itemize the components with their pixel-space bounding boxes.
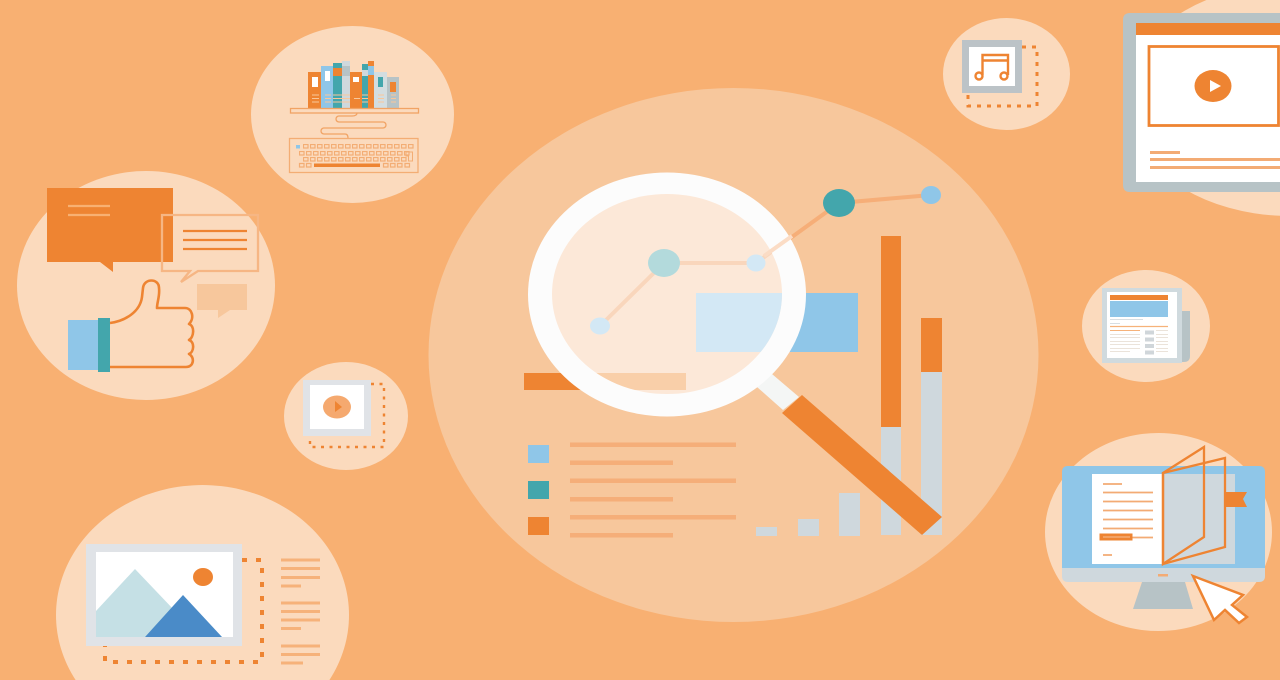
tablet body — [1123, 13, 1280, 192]
orange speech bubble — [47, 188, 173, 272]
icon: music note — [976, 55, 1008, 80]
page — [1102, 288, 1182, 363]
panel: music — [943, 18, 1070, 130]
caption lines — [1150, 151, 1280, 169]
article text — [1110, 320, 1168, 354]
line chart — [600, 186, 941, 326]
music frame — [962, 40, 1022, 93]
orange heading bar — [524, 373, 686, 390]
panel: newspaper — [1082, 270, 1210, 382]
photo — [1110, 301, 1168, 317]
paper roll — [1182, 311, 1190, 362]
books — [308, 61, 399, 108]
dotted outline — [105, 560, 262, 662]
panel: central analytics — [428, 88, 1038, 622]
video window — [1149, 46, 1278, 126]
picture frame — [86, 544, 242, 646]
shelf — [290, 108, 418, 113]
keyboard — [290, 138, 418, 172]
monitor stand — [1133, 582, 1193, 609]
mountains and sun — [96, 568, 222, 637]
panel: books and keyboard — [251, 26, 454, 203]
open book pages — [1092, 447, 1235, 564]
cable — [321, 113, 386, 138]
magnifying glass — [524, 172, 942, 535]
icon: cursor arrow — [1193, 576, 1247, 623]
stacked bar chart — [756, 236, 942, 536]
pale speech bubble — [197, 284, 247, 318]
panel: small video — [284, 362, 408, 470]
icon: thumbs up — [68, 280, 193, 372]
blue chart block — [696, 293, 858, 352]
panel: image card — [56, 485, 349, 680]
caption lines — [281, 558, 320, 664]
dotted outline — [310, 384, 384, 447]
monitor screen — [1062, 466, 1265, 568]
header bar — [1136, 23, 1280, 35]
icon: play button — [1194, 70, 1232, 102]
video frame — [303, 380, 371, 436]
legend — [528, 442, 736, 538]
headline bar — [1110, 295, 1168, 300]
outline speech bubble — [162, 215, 258, 282]
dotted outline — [968, 47, 1037, 106]
icon: play button — [323, 396, 351, 418]
monitor base — [1062, 568, 1265, 582]
panel: social feedback — [17, 171, 275, 400]
panel: computer with ebook — [1045, 433, 1272, 631]
magnified content — [590, 249, 782, 390]
panel: video tablet — [1123, 0, 1280, 216]
bookmark — [1225, 492, 1247, 507]
